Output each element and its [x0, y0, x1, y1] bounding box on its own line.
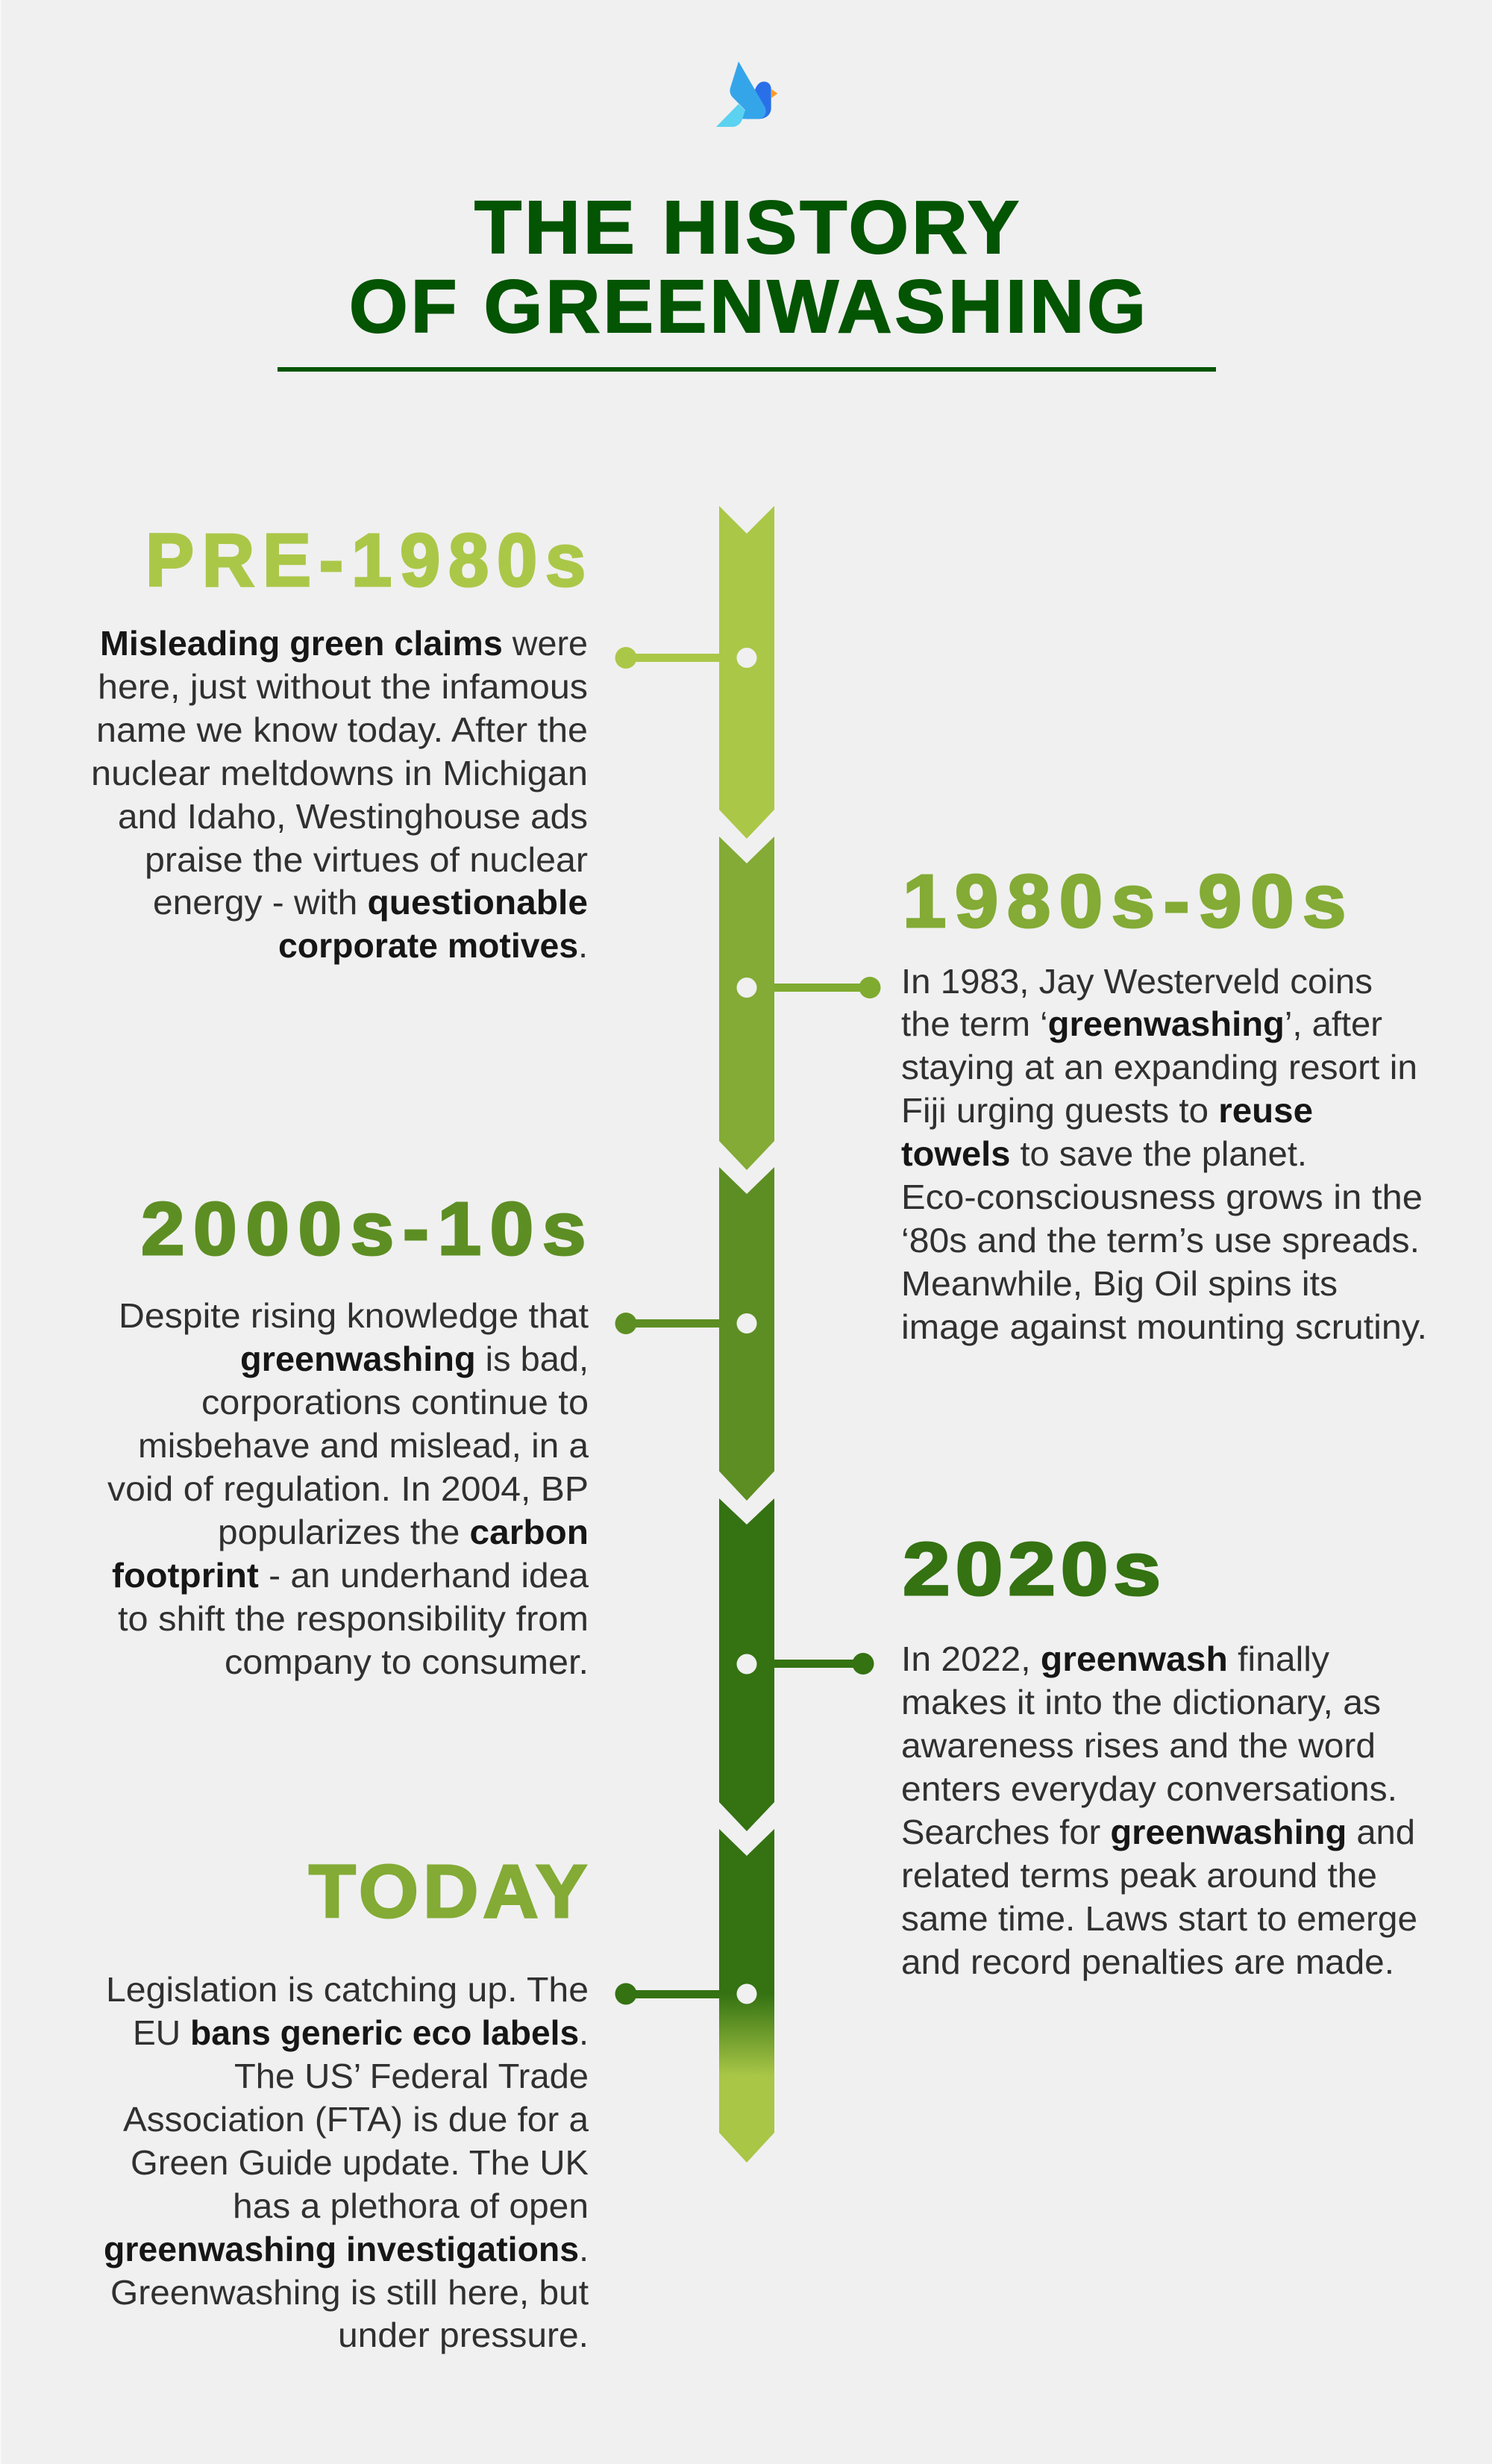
text block: 1980s-90s: towels to save the planet. — [901, 1134, 1307, 1173]
text block: 1980s-90s: Eco-consciousness grows in the — [901, 1178, 1423, 1216]
panel: 1980s-90s — [901, 860, 1427, 1346]
text block: pre-1980s: energy - with questionable — [153, 883, 588, 922]
text block: 1980s-90s: image against mounting scrutiny. — [901, 1307, 1427, 1346]
text block: 2020s — [901, 1639, 1417, 1981]
panel: 2000s-10s — [107, 1187, 595, 1681]
text block: pre-1980s: corporate motives. — [278, 926, 588, 965]
text block: today: Legislation is catching up. The — [106, 1970, 589, 2009]
text block: 2000s-10s: misbehave and mislead, in a — [138, 1426, 589, 1465]
text block: today: EU bans generic eco labels. — [133, 2013, 589, 2052]
text block: 2000s-10s: to shift the responsibility from — [118, 1599, 589, 1638]
text block: today: has a plethora of open — [233, 2186, 589, 2225]
text block: today: Association (FTA) is due for a — [123, 2100, 589, 2139]
text block: 2000s-10s: corporations continue to — [201, 1383, 589, 1422]
connector: 1980s-90s — [774, 977, 880, 998]
title: OF GREENWASHING — [349, 265, 1149, 348]
text block: 1980s-90s: In 1983, Jay Westerveld coins — [901, 962, 1373, 1001]
text block: 2000s-10s: company to consumer. — [225, 1642, 589, 1681]
heading: pre-1980s: PRE-1980s — [145, 519, 594, 602]
text block: 2000s-10s: void of regulation. In 2004, BP — [107, 1469, 589, 1508]
text block: 1980s-90s — [901, 962, 1427, 1346]
title underline — [278, 367, 1216, 372]
timeline arrow: 2020s — [719, 1498, 874, 1831]
text block: today: greenwashing investigations. — [104, 2230, 589, 2268]
text block: pre-1980s: here, just without the infamous — [98, 667, 588, 706]
text block: today: The US’ Federal Trade — [234, 2057, 589, 2095]
text block: 2020s: makes it into the dictionary, as — [901, 1683, 1381, 1722]
text block: 2020s: Searches for greenwashing and — [901, 1813, 1415, 1851]
timeline arrow: 1980s-90s — [719, 837, 880, 1170]
text block: 2000s-10s: footprint - an underhand idea — [112, 1556, 589, 1595]
connector: 2000s-10s — [615, 1313, 719, 1334]
text block: 2020s: and record penalties are made. — [901, 1942, 1394, 1981]
heading: today: TODAY — [309, 1850, 592, 1933]
text block: 1980s-90s: ‘80s and the term’s use spreads. — [901, 1221, 1420, 1260]
text block: today — [104, 1970, 589, 2354]
text block: pre-1980s: nuclear meltdowns in Michigan — [91, 754, 588, 792]
connector: pre-1980s — [615, 647, 719, 669]
text block: 2020s: related terms peak around the — [901, 1856, 1377, 1895]
text block: pre-1980s: praise the virtues of nuclear — [145, 840, 588, 879]
text block: pre-1980s — [91, 624, 588, 965]
text block: 2000s-10s: popularizes the carbon — [218, 1513, 589, 1551]
text block: today: Greenwashing is still here, but — [110, 2273, 589, 2312]
panel: pre-1980s — [91, 519, 594, 965]
text block: 1980s-90s: staying at an expanding resort in — [901, 1048, 1417, 1086]
timeline arrow: 2000s-10s — [615, 1167, 774, 1501]
text block: pre-1980s: name we know today. After the — [96, 710, 588, 749]
text block: 2000s-10s — [107, 1296, 589, 1681]
text block: 2000s-10s: greenwashing is bad, — [240, 1339, 589, 1378]
text block: 2000s-10s: Despite rising knowledge that — [119, 1296, 589, 1335]
heading: 2000s-10s: 2000s-10s — [141, 1187, 595, 1271]
timeline arrow: today — [615, 1829, 774, 2163]
text block: pre-1980s: and Idaho, Westinghouse ads — [118, 797, 588, 836]
text block: 2020s: awareness rises and the word — [901, 1726, 1376, 1765]
text block: pre-1980s: Misleading green claims were — [100, 624, 588, 663]
text block: 1980s-90s: the term ‘greenwashing’, after — [901, 1004, 1382, 1043]
title: THE HISTORY — [474, 186, 1022, 269]
icon: blue bird logo — [716, 61, 777, 127]
timeline arrow: pre-1980s — [615, 506, 774, 839]
panel: today — [104, 1850, 592, 2354]
text block: 2020s: same time. Laws start to emerge — [901, 1899, 1417, 1938]
panel: 2020s — [901, 1528, 1417, 1981]
title — [349, 186, 1149, 348]
text block: today: Green Guide update. The UK — [131, 2143, 589, 2182]
text block: 2020s: In 2022, greenwash finally — [901, 1639, 1329, 1678]
text block: 1980s-90s: Meanwhile, Big Oil spins its — [901, 1264, 1338, 1303]
connector: 2020s — [774, 1653, 874, 1675]
text block: 2020s: enters everyday conversations. — [901, 1769, 1397, 1808]
heading: 1980s-90s: 1980s-90s — [903, 860, 1355, 943]
connector: today — [615, 1983, 719, 2004]
text block: today: under pressure. — [338, 2316, 589, 2354]
heading: 2020s: 2020s — [903, 1528, 1166, 1611]
text block: 1980s-90s: Fiji urging guests to reuse — [901, 1091, 1313, 1130]
